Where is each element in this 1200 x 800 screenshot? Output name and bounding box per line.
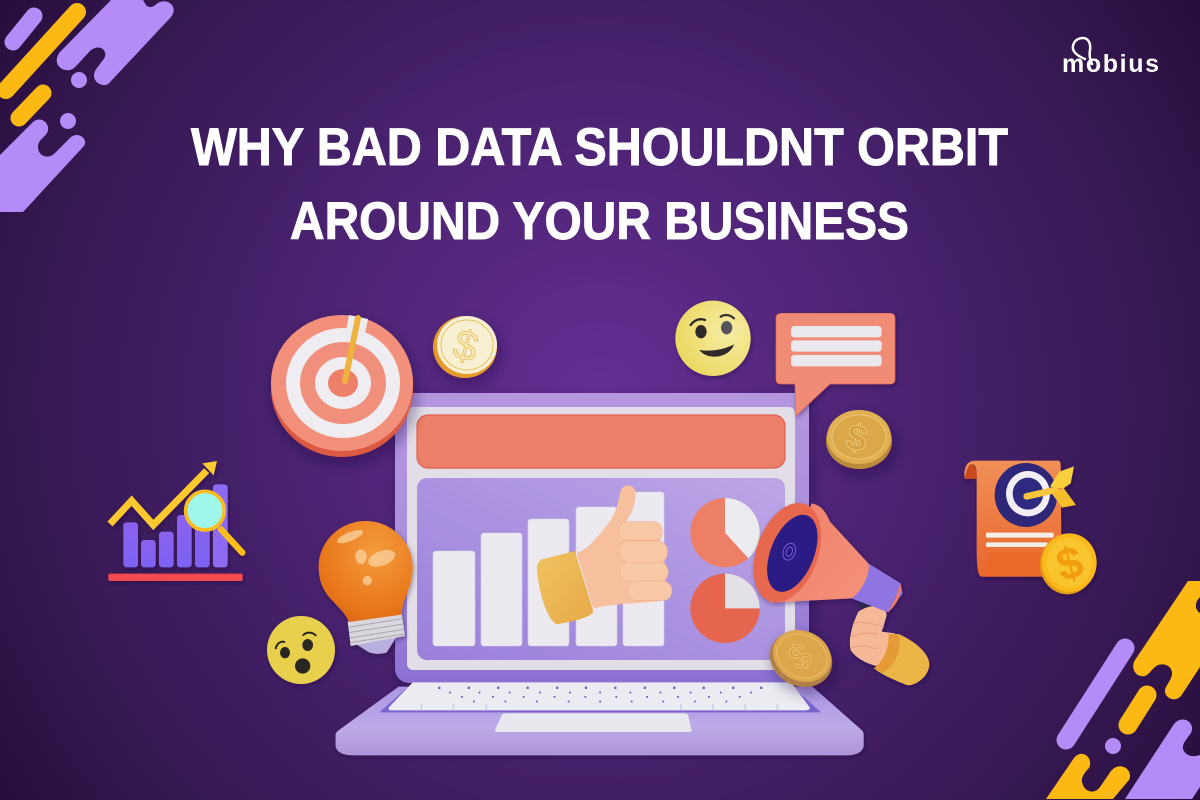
bulb base: [348, 613, 405, 654]
bar chart on screen: [433, 492, 664, 646]
dart: [1027, 466, 1076, 508]
icon: megaphone with hand: [741, 494, 929, 685]
sleeve: [874, 634, 929, 685]
red header bar: [417, 415, 785, 468]
megaphone body: [852, 563, 903, 612]
icon: cream dollar coin: $: [449, 320, 483, 371]
icon: growth chart with magnifier: [108, 461, 243, 581]
icon: gold coin right of laptop: [826, 410, 892, 469]
icon: target document with coin: [964, 461, 1097, 594]
red base line: [108, 574, 243, 581]
icon: gold coin on laptop corner: [761, 621, 841, 697]
icon: target with arrow: [271, 315, 413, 457]
icon: speech bubble: [776, 313, 895, 416]
trend arrow: [110, 461, 217, 525]
decorative shapes: bottom right: [1046, 581, 1200, 799]
magnifier: [186, 491, 242, 553]
bulb glass: [319, 521, 413, 622]
title: AROUND YOUR BUSINESS: [290, 192, 909, 251]
purple dashboard panel: [417, 478, 785, 660]
icon: gold coin on laptop corner: $: [783, 636, 818, 678]
target: [995, 463, 1057, 527]
icon: light bulb: [319, 521, 413, 654]
bottom pie: [690, 574, 760, 643]
icon: surprised emoji: [267, 616, 335, 684]
arrow: [345, 315, 368, 381]
top pie: [690, 498, 760, 567]
trackpad: [495, 713, 692, 732]
logo loop: [1073, 38, 1092, 64]
handle grip: [860, 600, 872, 608]
title: WHY BAD DATA SHOULDNT ORBIT: [191, 118, 1008, 177]
icon: gold coin right of laptop: $: [843, 415, 871, 460]
keyboard keys: [389, 682, 810, 710]
pie charts on screen: [690, 498, 760, 643]
scroll document: [964, 461, 1063, 577]
laptop: [336, 393, 864, 755]
icon: smiling emoji: [675, 301, 751, 376]
bulb highlights: [335, 527, 397, 585]
decorative shapes: top left: [0, 0, 174, 212]
coin: $: [1051, 536, 1088, 591]
bubble text lines: [791, 326, 882, 366]
icon: cream dollar coin: [433, 316, 497, 378]
laptop screen frame: [395, 393, 809, 683]
icon: thumbs up hand: [537, 485, 672, 624]
keyboard well: [379, 686, 821, 712]
laptop screen inner: [407, 407, 795, 670]
hand: [850, 606, 895, 667]
bars: [123, 484, 228, 567]
logo: mobius: [1062, 50, 1159, 78]
title: [191, 118, 1008, 251]
laptop base: [336, 682, 864, 755]
